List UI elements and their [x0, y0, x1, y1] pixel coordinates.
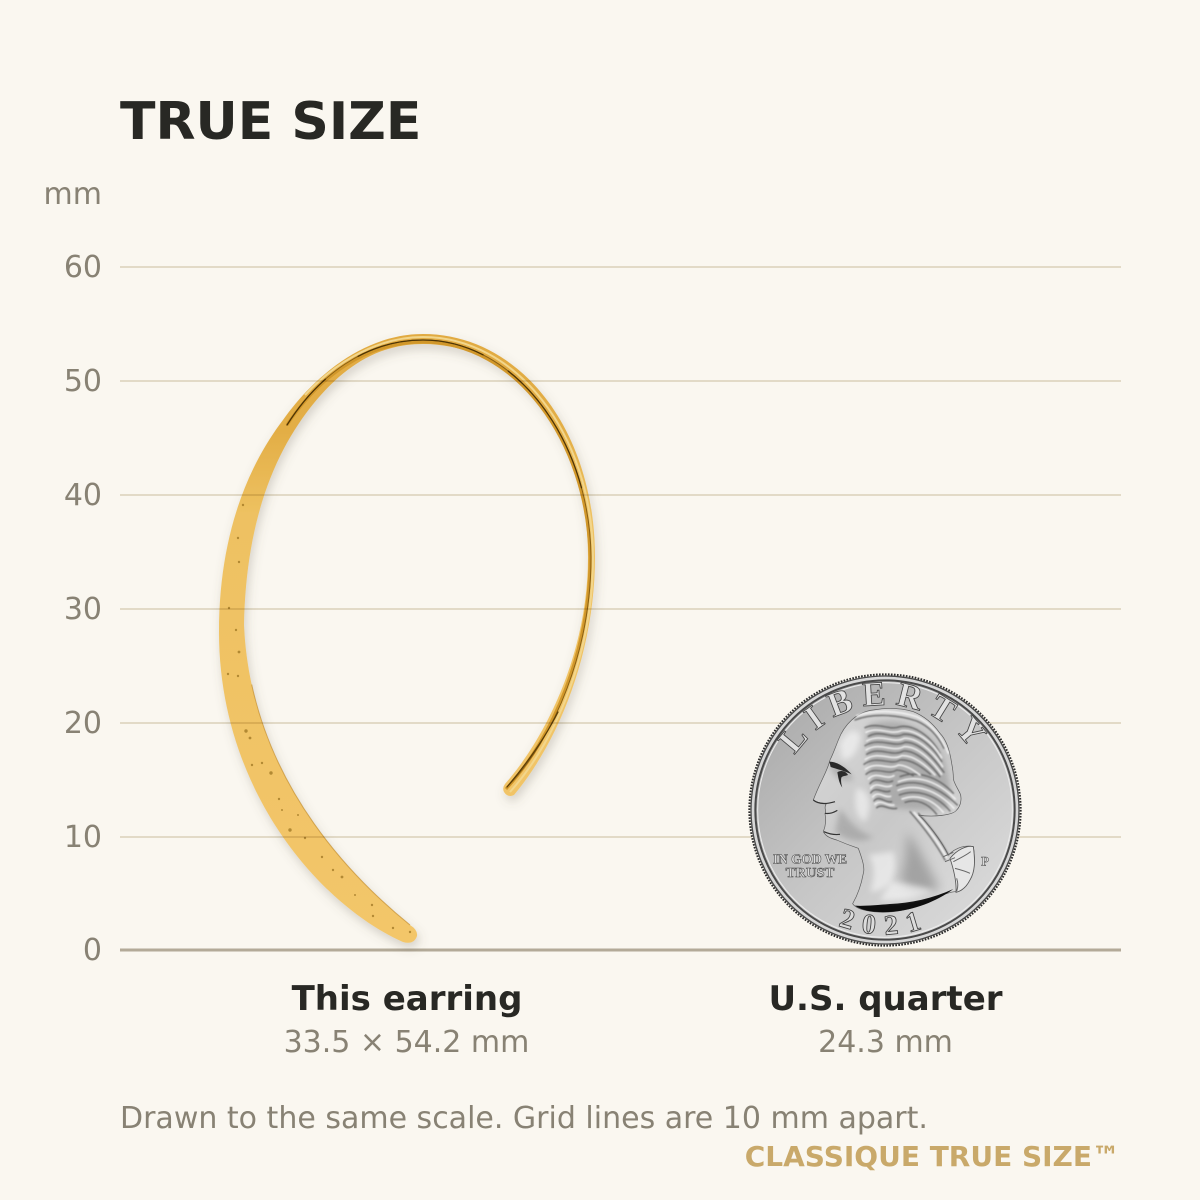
label: this earring: [284, 979, 529, 1060]
brand mark: CLASSIQUE TRUE SIZE™: [745, 1140, 1120, 1173]
bust of Washington: [813, 708, 974, 912]
neck cut shadow: [855, 889, 953, 912]
LIBERTY legend: LIBERTY: [777, 682, 988, 755]
ribbon bow: [943, 846, 974, 892]
speckles on flat band: [227, 504, 411, 933]
y axis grid and tick labels: 10: [64, 820, 102, 855]
y axis grid and tick labels: 20: [64, 706, 102, 741]
footnote: Drawn to the same scale. Grid lines are 10 mm apart.: [120, 1101, 928, 1136]
mint mark: P: [981, 855, 989, 869]
label: U.S. quarter: [768, 979, 1003, 1060]
quarter coin: [748, 673, 1022, 947]
y axis grid and tick labels: 30: [64, 592, 102, 627]
title: TRUE SIZE: [120, 92, 421, 152]
IN GOD WE TRUST motto: IN GOD WE: [773, 853, 847, 868]
TRUST line: TRUST: [786, 866, 835, 881]
axis unit label: mm: [44, 177, 102, 212]
brow and eye: [829, 762, 852, 788]
hair shading: [867, 721, 950, 810]
y axis grid and tick labels: [64, 250, 1121, 968]
face shading: [828, 764, 873, 841]
coin body: [749, 674, 1021, 946]
y axis grid and tick labels: 50: [64, 364, 102, 399]
label: U.S. quarter: 24.3 mm: [818, 1025, 953, 1060]
nose and mouth contours: [813, 800, 840, 835]
date 2021: 2021: [838, 908, 922, 936]
y axis grid and tick labels: 60: [64, 250, 102, 285]
y axis grid and tick labels: 40: [64, 478, 102, 513]
y axis grid and tick labels: 0: [83, 933, 102, 968]
label: U.S. quarter: U.S. quarter: [768, 979, 1003, 1019]
label: this earring: This earring: [292, 979, 522, 1019]
earring: [219, 334, 595, 943]
hair strands: [855, 712, 957, 860]
label: this earring: 33.5 × 54.2 mm: [284, 1025, 529, 1060]
